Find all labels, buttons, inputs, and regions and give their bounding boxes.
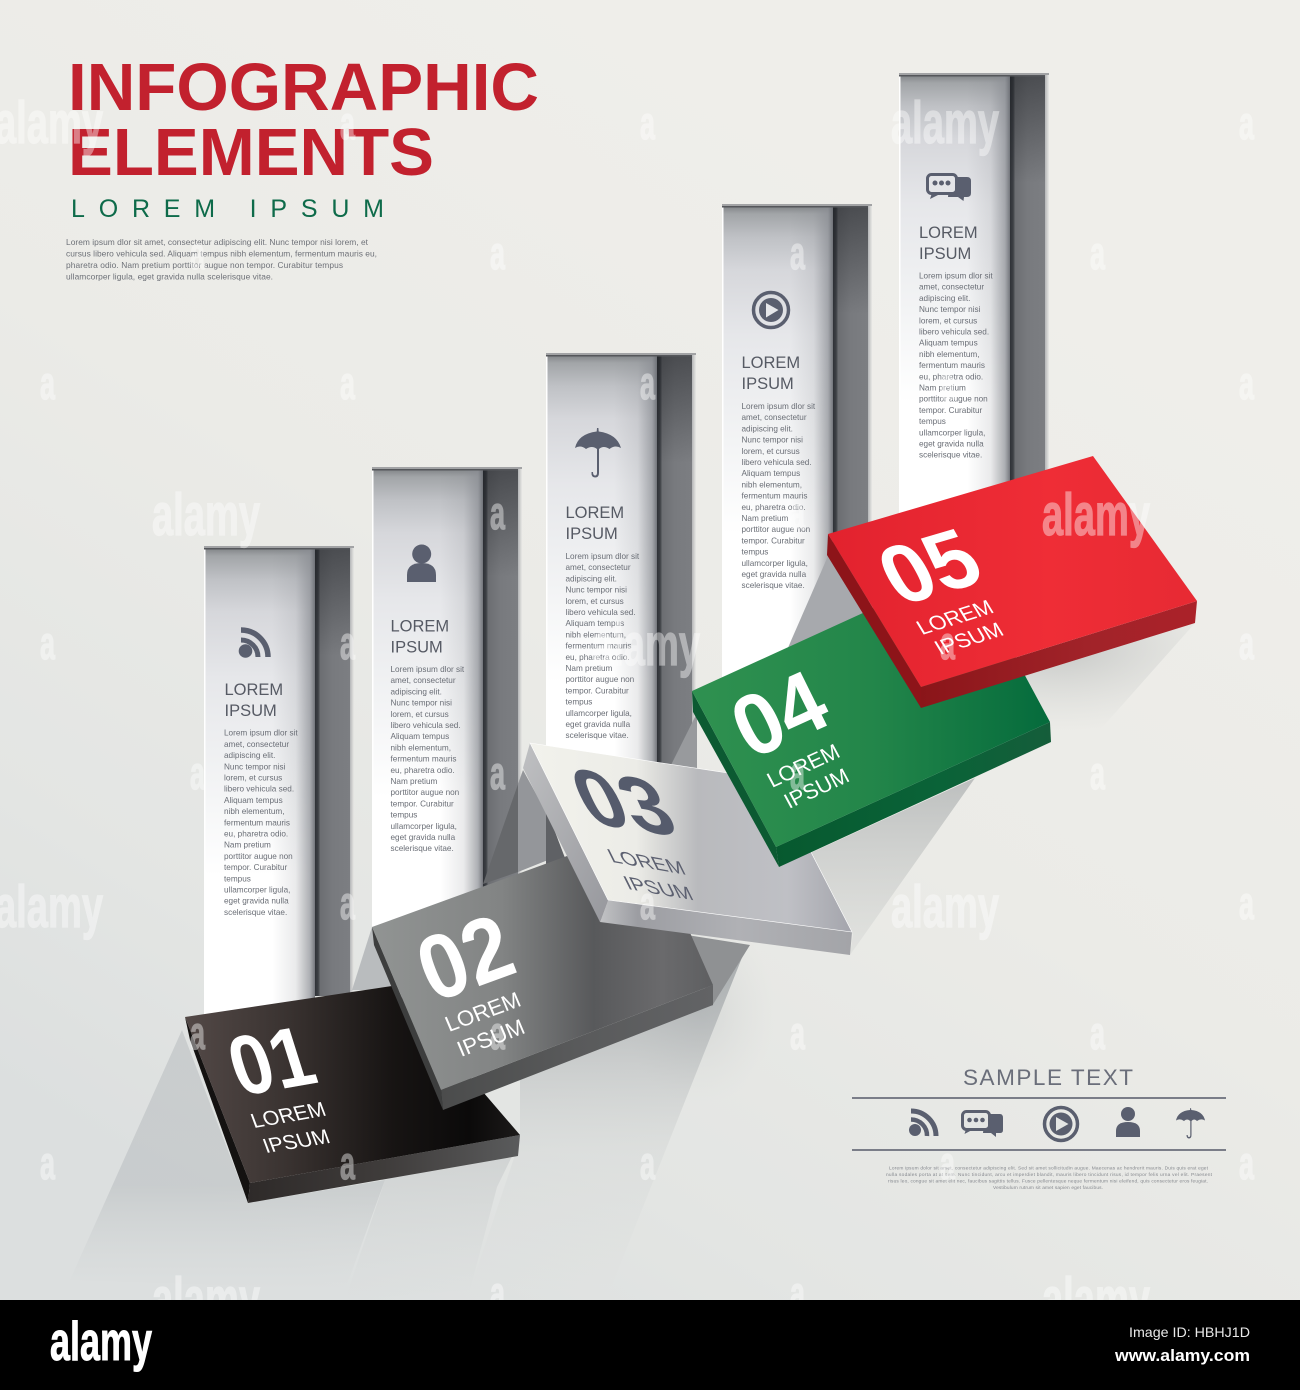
body text 5: libero vehicula sed. [919,328,989,336]
body text 4: Lorem ipsum dlor sit [742,402,816,411]
stock watermarks: alamy [152,482,260,548]
stock watermarks: alamy [152,1266,260,1332]
stock watermarks: a [1239,357,1254,409]
body text 5: fermentum mauris [919,361,985,370]
body text 4: tempor. Curabitur [742,536,805,545]
body text 1: lorem, et cursus [224,774,282,782]
stock watermarks: a [1090,227,1105,279]
stock watermarks: a [940,357,955,409]
body text 4: ullamcorper ligula, [742,559,808,568]
label 05: IPSUM [930,618,1008,659]
body text 5: scelerisque vitae. [919,451,982,460]
stock watermarks: a [790,227,805,279]
stock watermarks: a [40,617,55,669]
body text 4: eget gravida nulla [742,570,807,579]
icon: chat small [962,1112,1003,1137]
label 04: LOREM [763,740,844,792]
body text 1: Nam pretium [224,841,271,850]
heading 2: IPSUM [390,638,443,656]
recessed slot 3 [546,353,696,773]
stock watermarks: a [340,97,355,149]
icon: play [754,292,788,328]
body text 4: fermentum mauris [742,492,807,501]
stock watermarks: alamy [1042,1266,1150,1332]
body text 2: Nunc tempor nisi [390,699,452,708]
column 5 [899,73,1049,520]
label 02: LOREM [441,987,524,1037]
stock watermarks: a [940,1137,955,1189]
icon: rss [239,630,268,658]
body text 2: Lorem ipsum dlor sit [390,665,465,674]
number 05: 05 [862,512,998,623]
body text 1: ullamcorper ligula, [224,886,290,894]
heading 2: LOREM [390,618,449,636]
stock watermarks: alamy [0,874,103,940]
body text 3: nibh elementum, [566,630,626,639]
stock watermarks: alamy [1042,482,1150,548]
sample text paragraph: nulla sodales porta at at sem. Nunc tincidunt, arcu et imperdiet blandit, mauris libero tincidunt risus, id tempor felis urna vel elit. Praesent [886,1172,1213,1178]
number 01: 01 [217,1008,326,1113]
body text 1: Aliquam tempus [224,796,283,805]
stock watermarks: a [1239,877,1254,929]
icon row [909,1107,1205,1140]
body text 4: adipiscing elit. [742,424,793,433]
body text 2: tempus [390,811,417,820]
body text 4: Aliquam tempus [742,469,800,478]
body text 3: Aliquam tempus [566,619,624,628]
body text 2: eget gravida nulla [390,833,456,842]
label 01: LOREM [248,1098,329,1133]
stock watermarks: a [1239,617,1254,669]
column 3 [546,353,696,773]
stock watermarks: a [640,357,655,409]
title [68,51,539,190]
body text 4: scelerisque vitae. [742,581,805,590]
body text 1: eget gravida nulla [224,897,289,906]
body text 1: libero vehicula sed. [224,785,294,794]
heading 1: LOREM [224,681,283,699]
intro paragraph: ullamcorper ligula, eget gravida nulla scelerisque vitae. [66,271,273,281]
stock watermarks: a [640,1137,655,1189]
body text 4: libero vehicula sed. [742,458,812,467]
label 02: IPSUM [453,1014,528,1062]
body text 5: tempor. Curabitur [919,406,983,415]
body text 3: adipiscing elit. [566,574,617,583]
body text 5: eget gravida nulla [919,439,984,448]
stock watermarks: a [340,877,355,929]
label 04: IPSUM [780,764,853,813]
body text 5: nibh elementum, [919,350,980,359]
sample text paragraph: risus leo, congue sit amet elit nec, faucibus sagittis tellus. Fusce pellentesque neque fermentum nisi eleifend, quis consectetur eros feugiat. [888,1178,1208,1184]
column 2 [372,467,522,930]
brick 04 [692,566,1051,867]
body text 4: porttitor augue non [742,525,811,534]
label 01 [248,1098,333,1158]
shadows falling across the slots [352,556,870,990]
sample text paragraph [886,1166,1213,1191]
body text 4: Nunc tempor nisi [742,436,803,445]
icon: umbrella [575,428,621,478]
body text 1: amet, consectetur [224,740,289,749]
brick 02 [372,828,713,1110]
body text 2: fermentum mauris [390,755,456,764]
body text 2: tempor. Curabitur [390,799,454,808]
stock watermarks: a [790,747,805,799]
icon: person [407,544,436,582]
footer logo: alamy [50,1310,152,1372]
stock watermarks: a [790,487,805,539]
number 02: 02 [403,894,527,1022]
recessed slot 5 [899,73,1049,520]
body text 3: fermentum mauris [566,642,631,651]
recessed slot 2 [372,467,522,930]
stock watermarks: a [490,487,505,539]
stock watermarks: a [190,1007,205,1059]
body text 4: nibh elementum, [742,480,802,489]
sample text paragraph: Vestibulum rutrum sit amet sapien eget faucibus. [993,1185,1103,1191]
stock watermarks: a [40,357,55,409]
body text 4: eu, pharetra odio. [742,503,806,512]
recessed slot 1 [204,546,354,1018]
label 01: IPSUM [260,1126,333,1158]
stock watermarks: a [940,617,955,669]
body text 1: fermentum mauris [224,818,290,827]
body text 1: adipiscing elit. [224,751,275,760]
stock watermarks: a [490,747,505,799]
cast shadows on background [70,623,1195,1300]
body text 5: Aliquam tempus [919,339,978,348]
label 05: LOREM [912,595,998,639]
stock watermarks: a [640,877,655,929]
body text 2: amet, consectetur [390,676,456,685]
icon: umbrella small [1176,1108,1205,1138]
body text 2: adipiscing elit. [390,687,442,696]
stock watermarks: a [790,1007,805,1059]
stock watermarks: alamy [592,612,700,678]
stock watermarks: a [1239,1137,1254,1189]
body text 5: porttitor augue non [919,395,988,404]
icon: chat bubbles [928,174,971,201]
body text 3: tempor. Curabitur [566,686,629,695]
body text 4: amet, consectetur [742,413,807,422]
heading 1: IPSUM [224,702,277,720]
body text 5: Lorem ipsum dlor sit [919,272,993,280]
heading 4: IPSUM [742,375,794,393]
body text 5: ullamcorper ligula, [919,428,985,437]
stock watermarks: a [490,1007,505,1059]
title: INFOGRAPHIC [68,51,539,125]
body text 1: tempus [224,874,251,883]
stock watermarks: a [640,97,655,149]
body text 3: tempus [566,698,592,707]
column 4 [722,204,872,690]
body text 3: ullamcorper ligula, [566,709,632,718]
body text 5: Nam pretium [919,384,966,392]
website: www.alamy.com [1114,1347,1250,1365]
label 03: IPSUM [620,872,697,905]
icon: rss small [909,1111,936,1136]
stock watermarks: a [490,227,505,279]
label 03 [604,845,697,905]
body text 5: Nunc tempor nisi [919,305,981,314]
title: ELEMENTS [68,116,434,190]
stock watermarks: a [1090,1007,1105,1059]
brick 05 [827,456,1197,708]
number 03: 03 [556,751,690,855]
body text 5: tempus [919,417,946,426]
body text 4: Nam pretium [742,514,789,523]
stock watermarks: a [340,357,355,409]
stock watermarks: a [340,1137,355,1189]
sample text paragraph: Lorem ipsum dolor sit amet, consectetur adipiscing elit. Sed sit amet sollicitudin augue. Maecenas ac hendrerit mauris. Duis quis erat eget [889,1166,1209,1172]
intro paragraph: cursus libero vehicula sed. Aliquam tempus nibh elementum, fermentum mauris eu, [66,248,377,258]
subtitle: LOREM IPSUM [71,195,384,223]
stock watermarks: alamy [891,874,999,940]
footer bar [0,1300,1300,1390]
sample text heading: SAMPLE TEXT [963,1065,1133,1090]
brick 01 [185,986,520,1203]
stock watermarks: a [190,227,205,279]
body text 3: porttitor augue non [566,675,635,684]
body text 2: Aliquam tempus [390,732,449,741]
body text 3: Nam pretium [566,664,613,673]
icon: play small [1044,1108,1078,1140]
body text 2: lorem, et cursus [390,710,449,719]
column 1 [204,546,354,1018]
body text 3: amet, consectetur [566,563,631,572]
body text 3: libero vehicula sed. [566,608,636,617]
icon: person small [1116,1107,1140,1137]
body text 3: eget gravida nulla [566,720,631,729]
body text 1: porttitor augue non [224,852,293,861]
image id: Image ID: HBHJ1D [1129,1324,1250,1340]
number 04: 04 [716,651,842,777]
body text 2: Nam pretium [390,777,438,786]
body text 3: lorem, et cursus [566,597,624,606]
sample text section [852,1065,1226,1191]
body text 2: porttitor augue non [390,788,460,797]
body text 4: tempus [742,548,768,557]
body text 3: scelerisque vitae. [566,731,629,740]
recessed slot 4 [722,204,872,690]
body text 1: scelerisque vitae. [224,908,287,917]
body text 1: tempor. Curabitur [224,863,288,872]
label 04 [763,740,853,813]
body text 1: Nunc tempor nisi [224,762,286,771]
intro paragraph [66,237,377,281]
heading 5: IPSUM [919,245,971,263]
body text 5: amet, consectetur [919,283,984,292]
body text 3: Nunc tempor nisi [566,586,627,595]
heading 3: LOREM [566,504,624,522]
body text 3: Lorem ipsum dlor sit [566,552,640,561]
stock watermarks: a [1090,747,1105,799]
body text 2: scelerisque vitae. [390,844,454,853]
stock watermarks: alamy [891,90,999,156]
body text 5: adipiscing elit. [919,294,970,303]
intro paragraph: Lorem ipsum dlor sit amet, consectetur adipiscing elit. Nunc tempor nisi lorem, et [66,237,369,247]
stock watermarks: a [190,747,205,799]
body text 5: lorem, et cursus [919,316,977,325]
body text 1: Lorem ipsum dlor sit [224,729,298,738]
body text 1: eu, pharetra odio. [224,830,288,838]
stock watermarks: a [340,617,355,669]
body text 1: nibh elementum, [224,807,285,816]
body text 5: eu, pharetra odio. [919,372,983,381]
stock watermarks: alamy [0,90,103,156]
label 02 [441,987,528,1062]
intro paragraph: pharetra odio. Nam pretium porttitor augue non tempor. Curabitur tempus [66,260,343,270]
heading 4: LOREM [742,354,800,372]
label 05 [912,595,1008,659]
body text 2: libero vehicula sed. [390,721,461,730]
body text 2: eu, pharetra odio. [390,766,455,775]
stock watermarks: a [790,1267,805,1319]
body text 2: ullamcorper ligula, [390,822,457,831]
body text 2: nibh elementum, [390,743,451,752]
stock watermarks: a [40,1137,55,1189]
label 03: LOREM [604,845,690,879]
heading 5: LOREM [919,224,978,242]
stock watermarks: a [490,1267,505,1319]
body text 4: lorem, et cursus [742,447,800,456]
heading 3: IPSUM [566,525,618,543]
brick 03 [523,743,852,955]
stock watermarks: a [1239,97,1254,149]
body text 3: eu, pharetra odio. [566,653,630,662]
